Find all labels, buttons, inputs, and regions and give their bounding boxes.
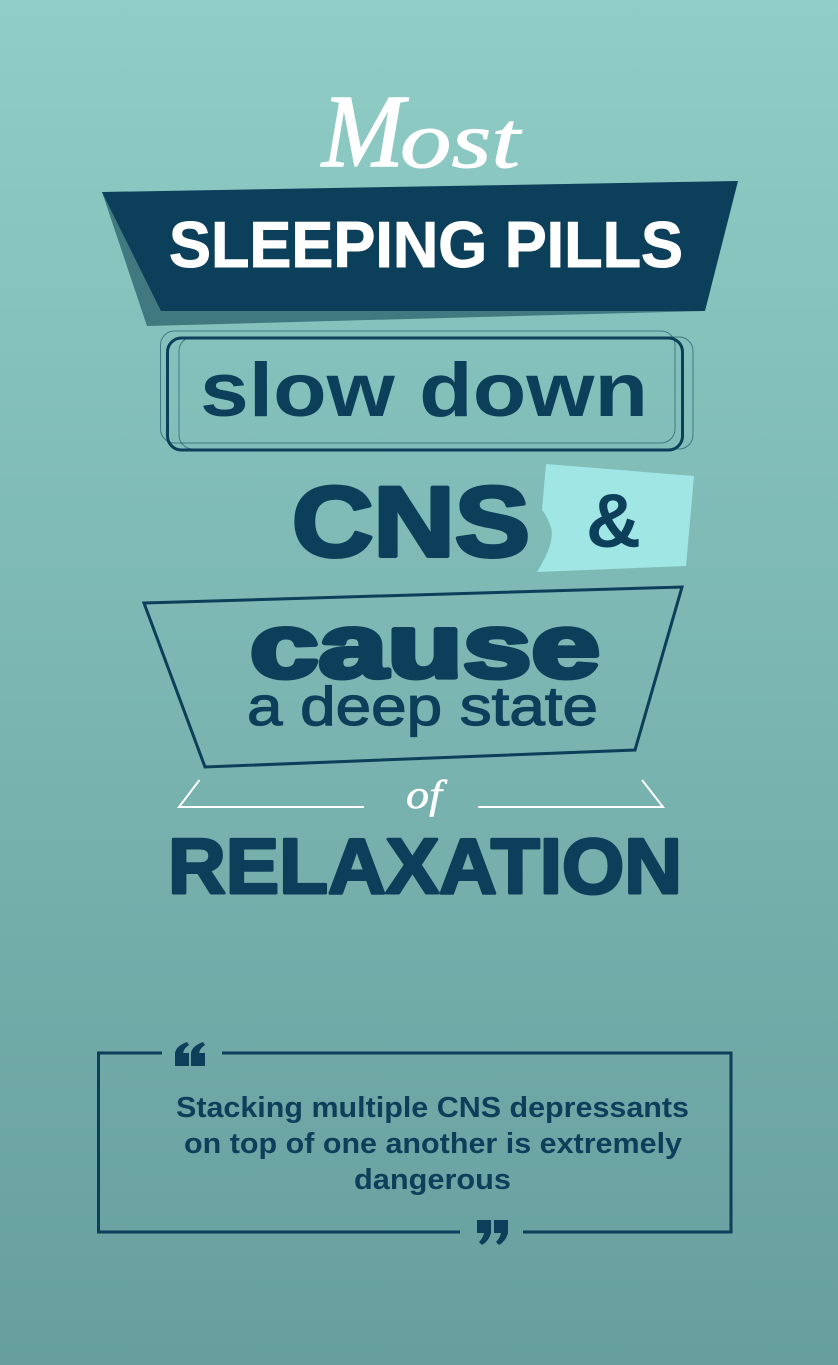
banner shadow xyxy=(102,192,705,326)
divider: of xyxy=(179,772,663,817)
trapezoid outline xyxy=(144,587,682,767)
a deep state text: a deep state xyxy=(247,675,598,737)
line 2: on top of one another is extremely xyxy=(184,1128,682,1160)
script letters ost: ost xyxy=(400,97,522,185)
left bracket line xyxy=(179,780,364,807)
slow down text: slow down xyxy=(200,348,648,433)
ampersand: & xyxy=(586,479,641,564)
right bracket line xyxy=(478,780,663,807)
cause text: cause xyxy=(250,597,600,697)
thick frame xyxy=(168,338,682,450)
icon: closing quote mark xyxy=(477,1220,508,1245)
panel: slow down xyxy=(160,331,693,450)
script capital M: M xyxy=(320,74,409,189)
quote text xyxy=(176,1092,689,1196)
heading: relaxation: RELAXATION xyxy=(168,822,682,910)
line 3: dangerous xyxy=(354,1164,511,1196)
line 1: Stacking multiple CNS depressants xyxy=(176,1092,689,1124)
of text: of xyxy=(406,772,448,817)
thin frame left xyxy=(160,331,675,443)
heading: Most xyxy=(320,74,522,189)
icon: opening quote mark xyxy=(175,1042,205,1066)
thin frame right xyxy=(179,337,693,449)
banner shape xyxy=(102,181,738,311)
panel: quote xyxy=(98,1042,731,1245)
heading: CNS: CNS xyxy=(292,466,530,577)
banner text: SLEEPING PILLS xyxy=(169,208,683,281)
tag shape xyxy=(537,464,694,572)
banner: sleeping pills xyxy=(102,181,738,326)
panel: ampersand tag xyxy=(537,464,694,572)
quote frame xyxy=(98,1053,731,1232)
panel: cause a deep state xyxy=(144,587,682,767)
